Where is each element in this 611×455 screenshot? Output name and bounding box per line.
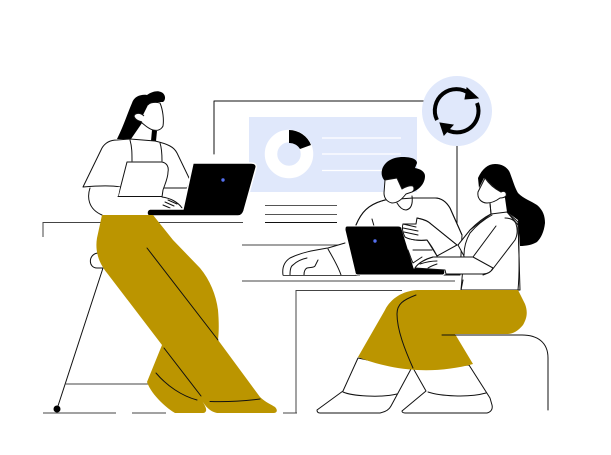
person: left woman bbox=[83, 91, 190, 215]
right woman's forearm bbox=[415, 257, 493, 274]
seat right bbox=[442, 335, 548, 410]
hair bbox=[382, 157, 425, 192]
face bbox=[140, 102, 163, 130]
apron bbox=[118, 162, 168, 197]
stool left bbox=[54, 253, 148, 412]
background frame line bbox=[214, 101, 457, 226]
donut chart bbox=[271, 130, 311, 172]
face bbox=[478, 178, 506, 203]
neck bbox=[397, 196, 412, 210]
icon: sync circle bbox=[422, 76, 492, 146]
left arm bbox=[283, 243, 345, 275]
legs: right woman bbox=[317, 358, 492, 413]
person: man bbox=[283, 157, 462, 276]
hair bbox=[117, 91, 165, 139]
panel: dashboard screen bbox=[249, 117, 417, 192]
text placeholder lines bbox=[265, 206, 337, 222]
person: right woman bbox=[458, 164, 545, 290]
pants: right woman bbox=[358, 290, 527, 370]
torso bbox=[356, 198, 462, 275]
pants: left woman bbox=[96, 215, 277, 413]
table lines bbox=[43, 222, 455, 413]
laptop: man bbox=[345, 226, 445, 275]
panel text lines bbox=[322, 138, 401, 170]
shirt bbox=[83, 139, 190, 188]
hair bbox=[478, 164, 545, 246]
man's right hand bbox=[402, 218, 457, 263]
laptop left bbox=[147, 163, 256, 216]
arm bbox=[89, 187, 184, 215]
neck bbox=[151, 130, 157, 141]
ear bbox=[134, 113, 144, 122]
body bbox=[458, 203, 520, 290]
face bbox=[384, 178, 414, 203]
